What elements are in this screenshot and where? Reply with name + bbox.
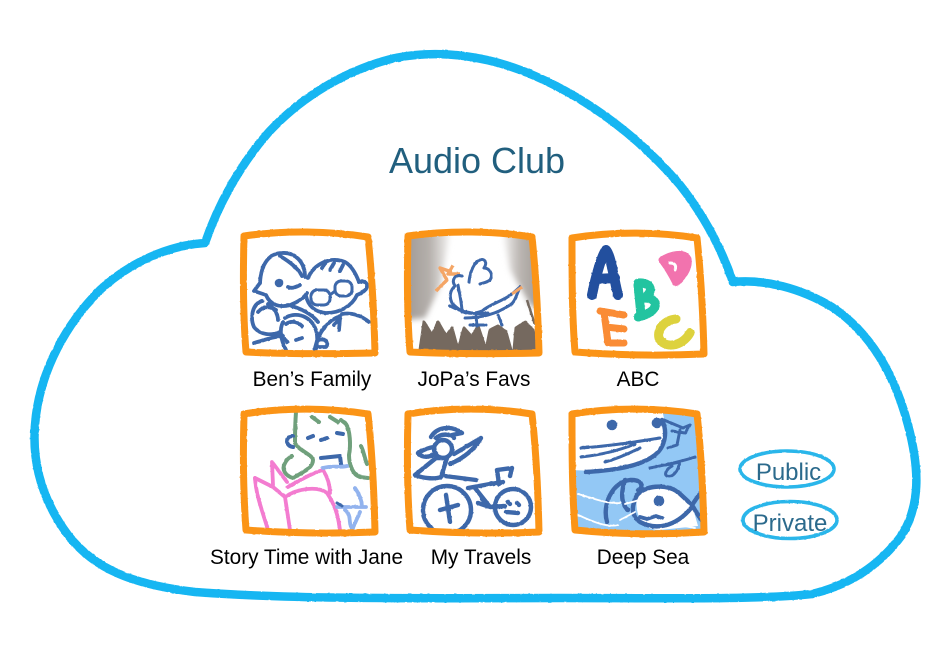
album: Story Time with Jane [210,409,403,569]
button: Public [740,451,834,487]
label: Deep Sea [597,546,690,569]
title: Audio Club [389,140,565,181]
frame [243,232,375,354]
label: My Travels [431,546,531,569]
icon: cyclist and bicycle [415,428,531,534]
label: Ben’s Family [253,368,372,391]
album: Deep Sea [570,409,705,569]
frame [572,409,704,534]
button: Private: Private [753,510,827,537]
button: Public: Public [756,459,821,486]
icon: whale and fish in the sea [576,413,700,531]
icon: colored letters [592,250,690,345]
label: Story Time with Jane [210,546,403,569]
icon: duck on stage [405,232,540,350]
frame [407,409,539,533]
frame [407,232,539,354]
cloud outline [34,54,916,598]
album: My Travels [407,409,539,569]
frame [243,409,375,533]
icon: family portrait [252,253,369,350]
album: Ben's Family [243,232,375,391]
frame [572,233,704,355]
album: JoPa's Favs [405,232,540,391]
icon: woman reading a book [255,412,368,530]
button: Private [743,502,837,538]
album: ABC [572,233,704,391]
label: ABC [617,368,659,391]
label: JoPa’s Favs [418,368,530,391]
